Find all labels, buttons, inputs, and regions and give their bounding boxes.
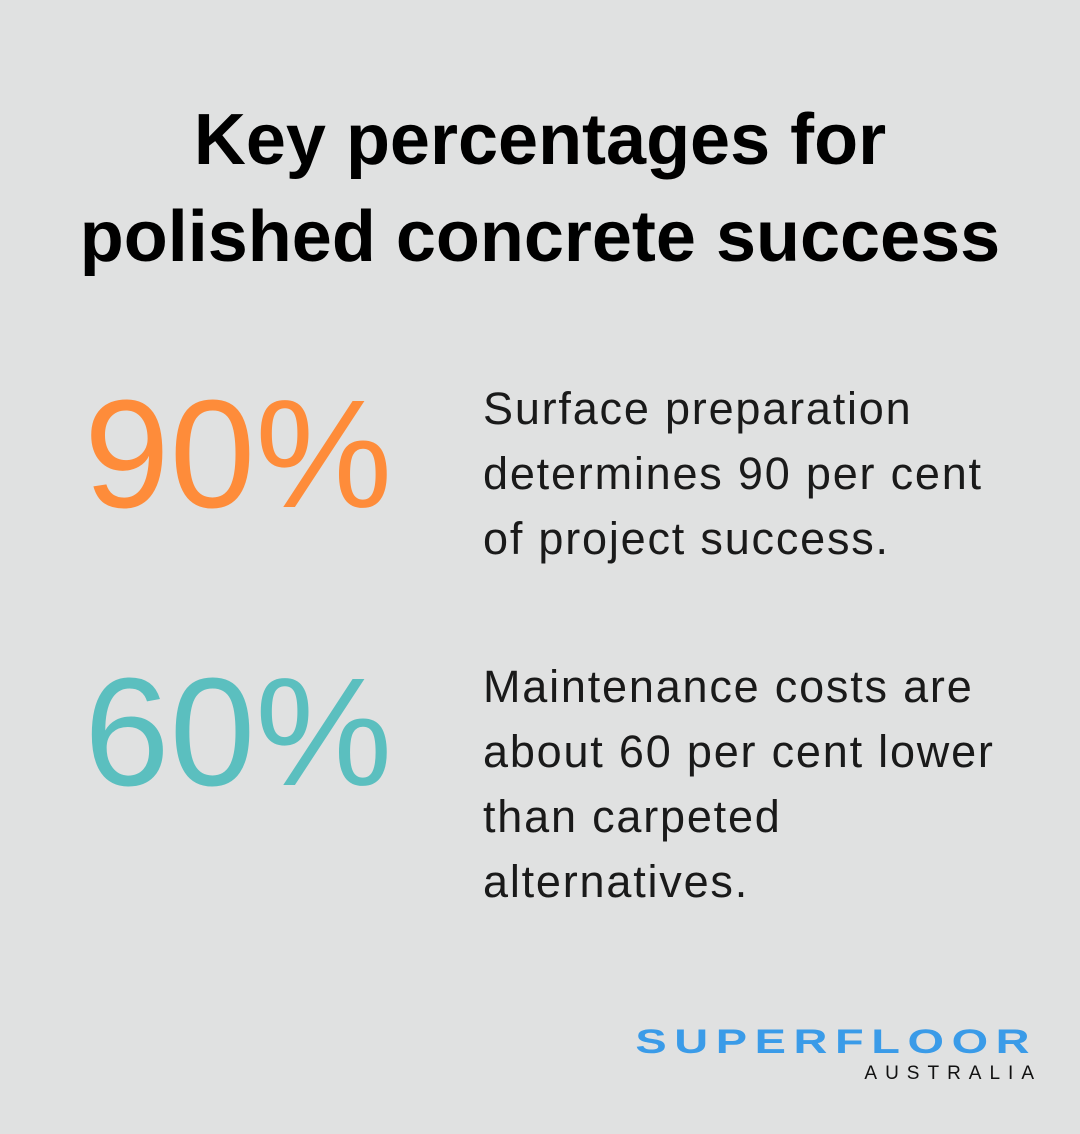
text: maintenance costs: than carpeted [483,791,782,842]
logo: SUPERFLOOR [635,1023,1037,1061]
stat: 90%: 90% [84,368,392,540]
text: maintenance costs: Maintenance costs are [483,661,974,712]
text: surface preparation: of project success. [483,513,890,564]
text: surface preparation [483,383,983,564]
title: Key percentages for [194,100,886,180]
text: maintenance costs: alternatives. [483,856,749,907]
logo: AUSTRALIA [864,1063,1042,1084]
stat: 60%: 60% [84,646,392,818]
title [80,100,1000,277]
text: maintenance costs: about 60 per cent lower [483,726,995,777]
text: surface preparation: Surface preparation [483,383,912,434]
text: surface preparation: determines 90 per cent [483,448,983,499]
logo [635,1023,1042,1084]
text: maintenance costs [483,661,995,907]
title: polished concrete success [80,197,1000,277]
